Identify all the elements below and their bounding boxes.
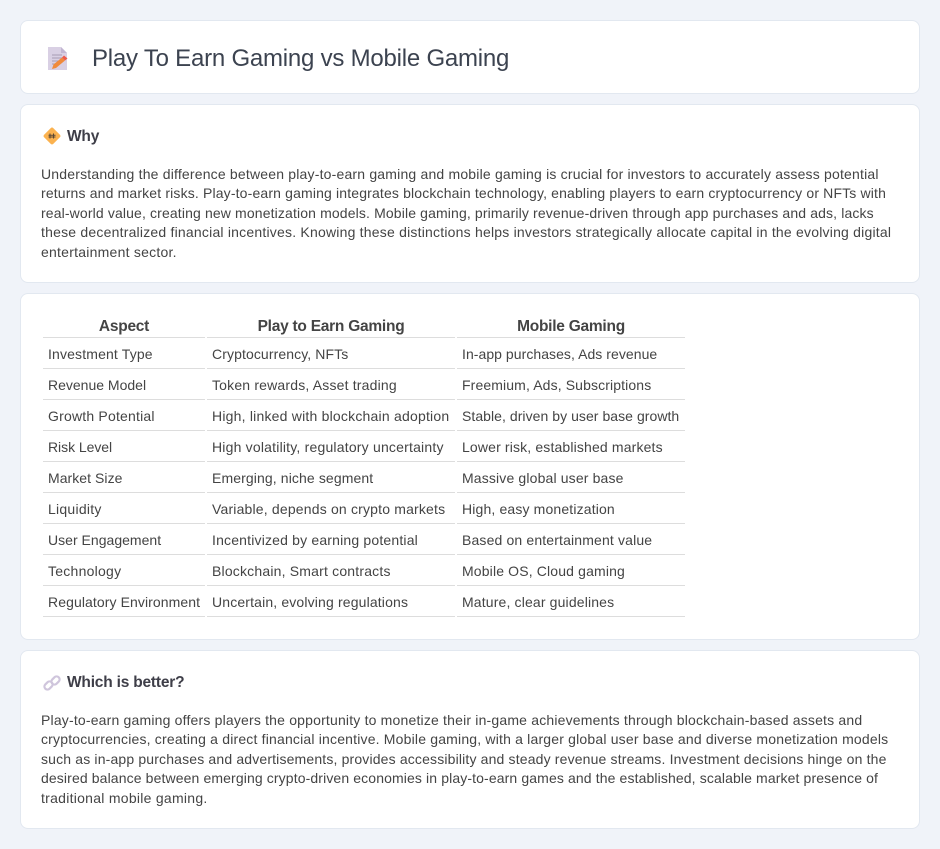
comparison table: User Engagement [48,532,161,548]
text block: which is better paragraph: such as in-app purchases and advertisements, provides accessibility and steady revenue streams. Investment decisions hinge on the [41,751,887,767]
heading: why: Why [67,128,99,145]
text block: why paragraph: real-world value, creating new monetization models. Mobile gaming, primarily revenue-driven through app purchases and ads, lacks [41,205,874,221]
comparison table: Mature, clear guidelines [462,594,614,610]
comparison table: Market Size [48,470,122,486]
text block: why paragraph: Understanding the difference between play-to-earn gaming and mobile gaming is crucial for investors to accurately assess potential [41,166,879,182]
comparison table: Revenue Model [48,377,146,393]
comparison table: Lower risk, established markets [462,439,663,455]
comparison table: Uncertain, evolving regulations [212,594,408,610]
icon: chain link [43,675,61,691]
icon: document with pencil [48,47,68,70]
comparison table: Growth Potential [48,408,155,424]
text block: which is better paragraph: Play-to-earn gaming offers players the opportunity to monetize their in-game achievements through blockchain-based assets and [41,712,862,728]
text block: why paragraph: entertainment sector. [41,244,177,260]
comparison table: High volatility, regulatory uncertainty [212,439,444,455]
comparison table: Massive global user base [462,470,624,486]
comparison table: Liquidity [48,501,102,517]
comparison table: Token rewards, Asset trading [212,377,397,393]
heading: which is better: Which is better? [67,674,184,691]
comparison table: Variable, depends on crypto markets [212,501,445,517]
comparison table: Risk Level [48,439,112,455]
panel: which is better [20,650,920,829]
text block: which is better paragraph: desired balance between emerging crypto-driven economies in play-to-earn games and the established, scalable market presence of [41,770,878,786]
text block: which is better paragraph: traditional mobile gaming. [41,790,208,806]
comparison table: Aspect [99,318,149,335]
panel: title card [20,20,920,94]
comparison table: Regulatory Environment [48,594,200,610]
comparison table: Technology [48,563,121,579]
text block: why paragraph [41,166,891,260]
title: Play To Earn Gaming vs Mobile Gaming [92,45,509,72]
panel: comparison table card [20,293,920,640]
text block: why paragraph: returns and market risks. Play-to-earn gaming integrates blockchain technology, enabling players to earn cryptocurrency or NFTs with [41,185,886,201]
text block: which is better paragraph: cryptocurrencies, creating a direct financial incentive. Mobile gaming, with a larger global user base and diverse monetization models [41,731,888,747]
comparison table: High, linked with blockchain adoption [212,408,449,424]
comparison table: Emerging, niche segment [212,470,373,486]
icon: diamond warning sign [44,128,60,144]
comparison table: Based on entertainment value [462,532,652,548]
comparison table [43,318,685,617]
comparison table: In-app purchases, Ads revenue [462,346,657,362]
comparison table: Play to Earn Gaming [258,318,404,335]
comparison table: Blockchain, Smart contracts [212,563,391,579]
comparison table: High, easy monetization [462,501,615,517]
text block: which is better paragraph [41,712,888,806]
comparison table: Mobile Gaming [517,318,625,335]
comparison table: Incentivized by earning potential [212,532,418,548]
comparison table: Cryptocurrency, NFTs [212,346,348,362]
comparison table: Stable, driven by user base growth [462,408,679,424]
comparison table: Freemium, Ads, Subscriptions [462,377,651,393]
text block: why paragraph: these decentralized financial incentives. Knowing these distinctions helps investors strategically allocate capital in the evolving digital [41,224,891,240]
panel: why [20,104,920,283]
comparison table: Mobile OS, Cloud gaming [462,563,625,579]
comparison table: Investment Type [48,346,153,362]
